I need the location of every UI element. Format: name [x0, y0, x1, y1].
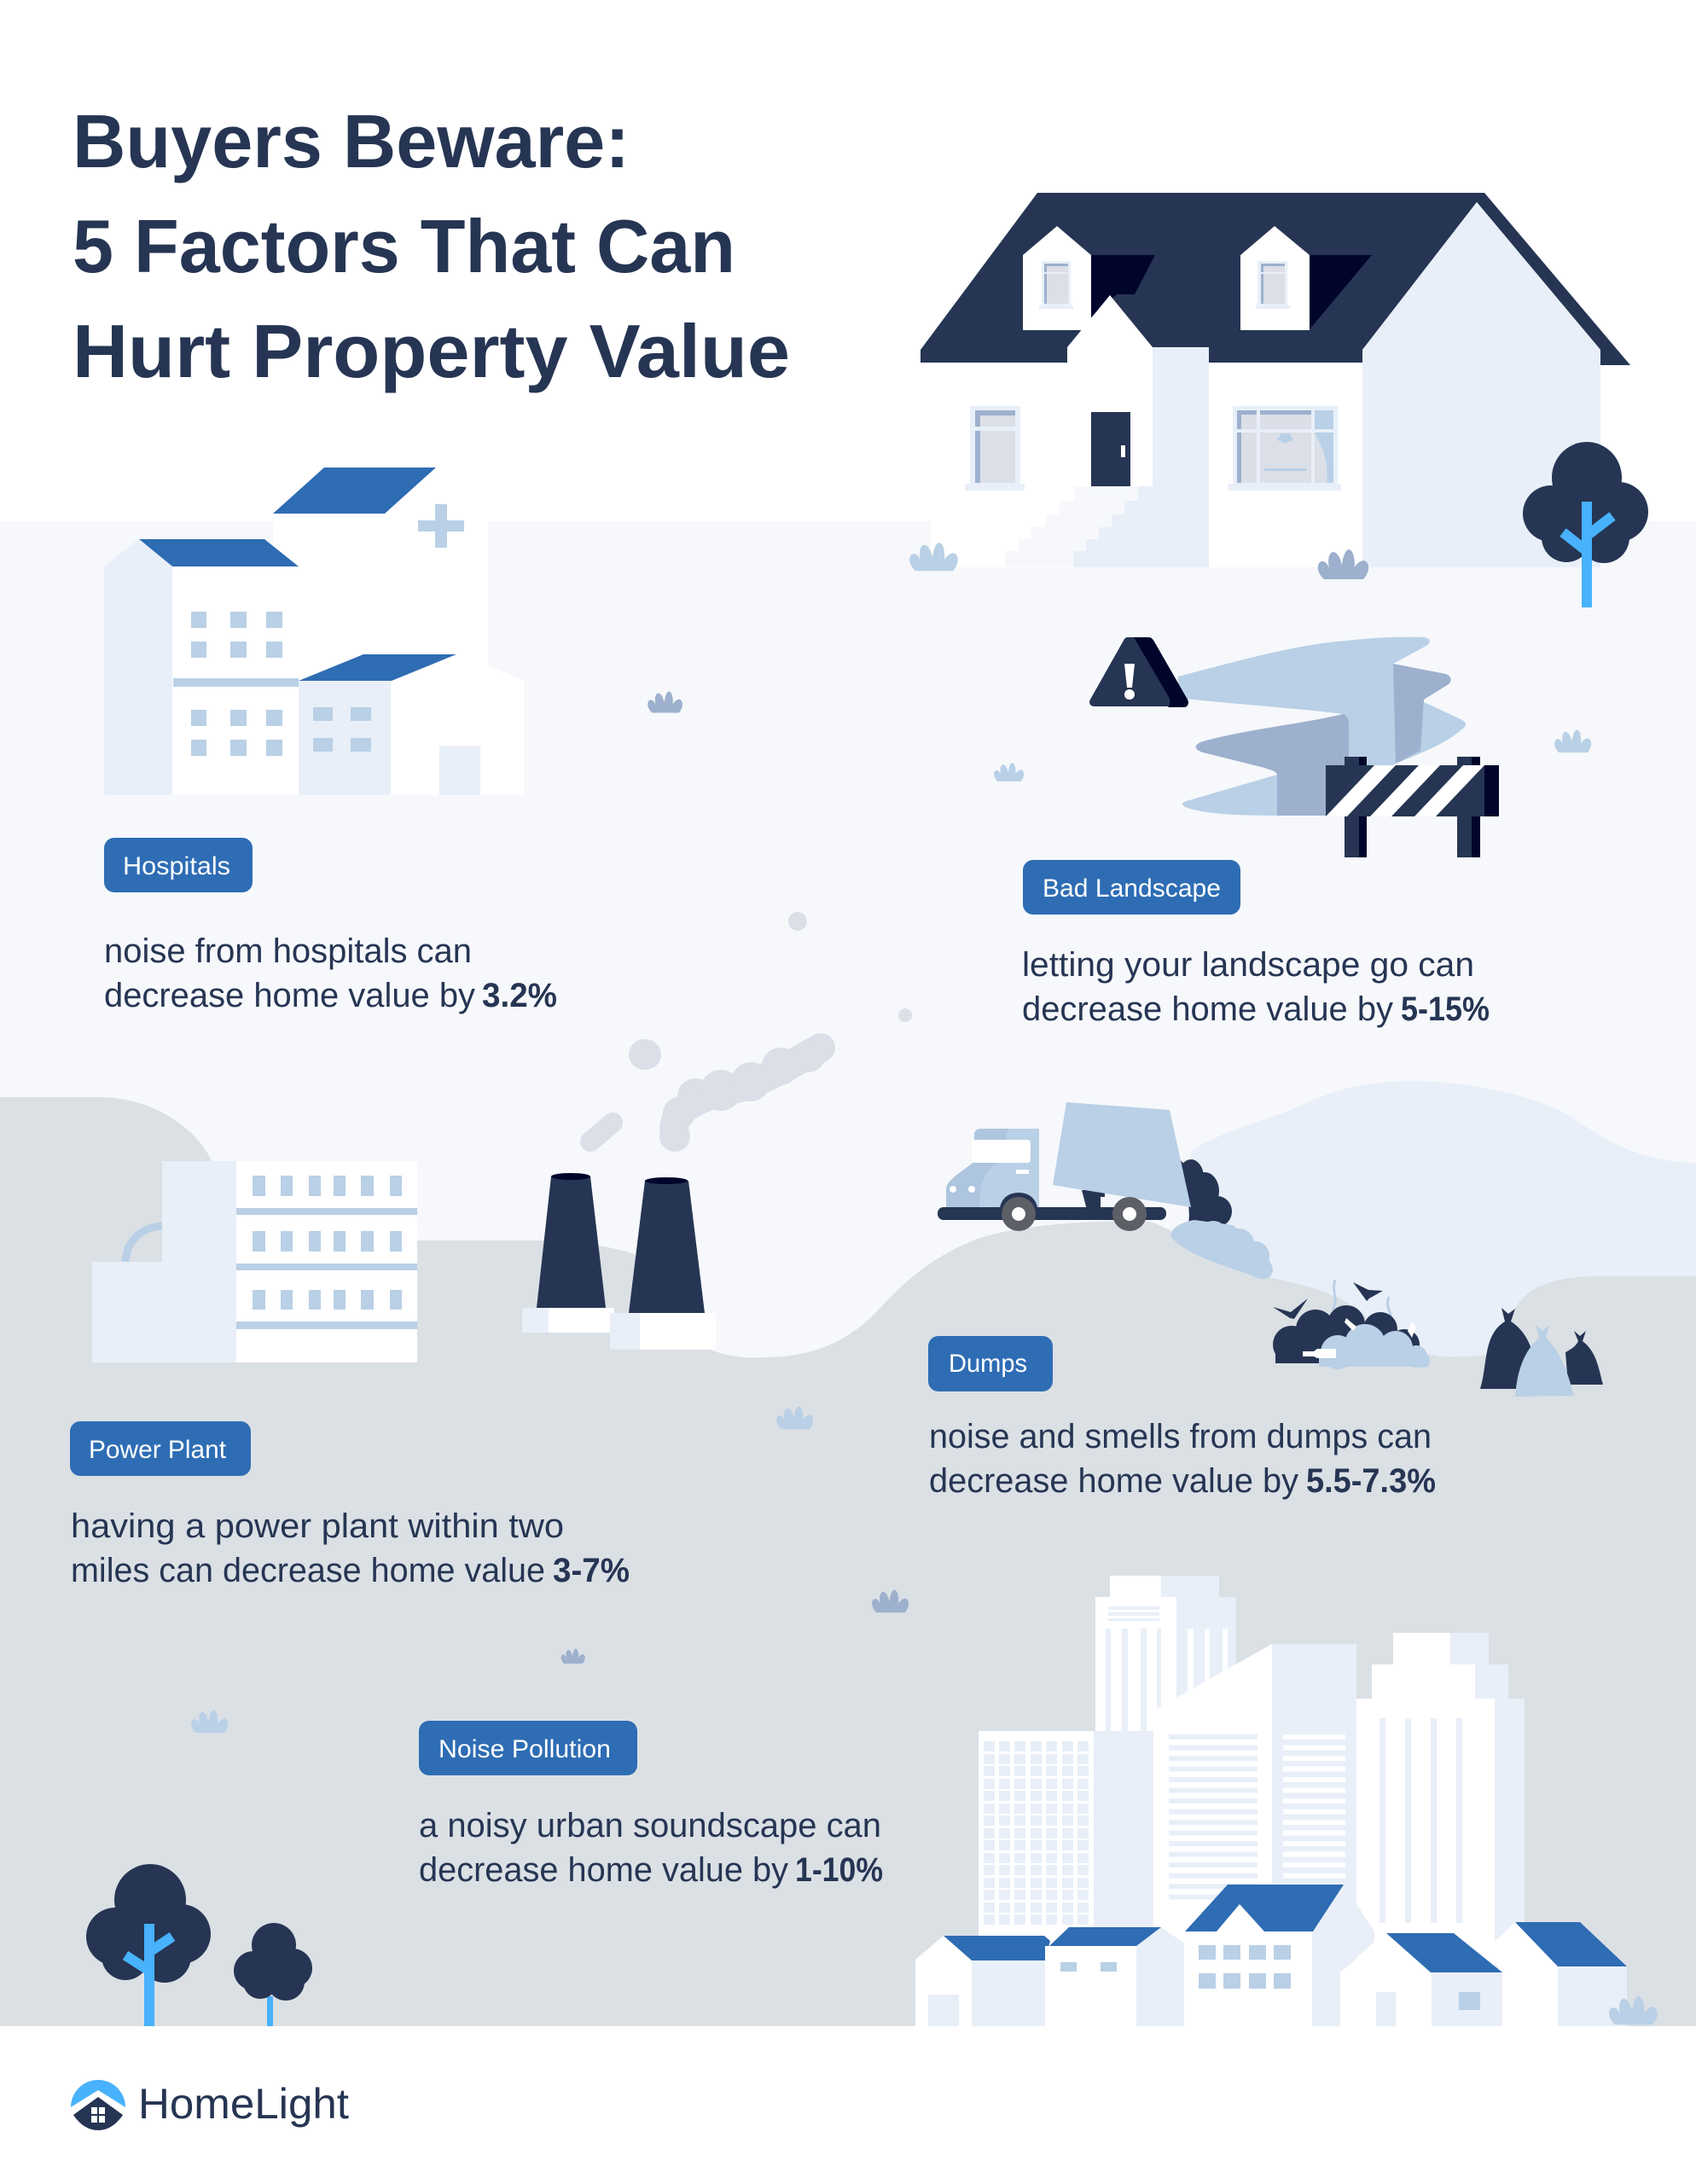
label: Noise Pollution: Noise Pollution: [439, 1735, 611, 1763]
bushes: [191, 543, 1591, 1733]
door: [1091, 412, 1130, 486]
hospital left wall: [104, 539, 172, 795]
birds: [1273, 1282, 1383, 1319]
dark trash: [1273, 1305, 1420, 1363]
light trash: [1319, 1324, 1430, 1369]
text: noise pollution: a noisy urban soundscape can: [419, 1807, 881, 1844]
bottle: [1303, 1349, 1336, 1358]
title: Buyers Beware:: [73, 99, 630, 183]
ground: pale background: [0, 521, 1696, 2026]
label: Power Plant: Power Plant: [89, 1436, 227, 1464]
icon: medical cross: [418, 504, 464, 548]
smokestack right: [610, 1177, 716, 1350]
icon: large tree: [86, 1864, 211, 2026]
truck hydraulic: [1082, 1190, 1105, 1210]
text: hospitals: [104, 932, 557, 1014]
hospital roofs: [139, 468, 456, 681]
plant wall: [92, 1161, 236, 1362]
illustration: power plant: [92, 1161, 716, 1362]
text: bad landscape: [1022, 946, 1490, 1028]
text: noise pollution: 1-10%: [795, 1851, 883, 1889]
house side wing: [1362, 202, 1600, 567]
large window: [1228, 406, 1341, 491]
illustration: city skyline: [915, 1576, 1627, 2027]
falling dark waste: [1178, 1159, 1232, 1229]
road barrier: [1326, 757, 1499, 857]
icon: small tree: [234, 1923, 312, 2026]
falling light waste: [1170, 1220, 1273, 1279]
text: power plant: miles can decrease home value: [71, 1552, 545, 1589]
ground: grey hills: [0, 1097, 1696, 2026]
back tower: [1095, 1576, 1236, 1757]
text: power plant: 3-7%: [553, 1552, 630, 1589]
text: bad landscape: decrease home value by: [1022, 990, 1393, 1028]
porch gable: [1067, 295, 1153, 486]
label: Power Plant: [70, 1421, 251, 1476]
house roof: [921, 193, 1630, 365]
illustration: dump truck: [938, 1102, 1273, 1279]
text: dumps: noise and smells from dumps can: [929, 1418, 1432, 1455]
label: Dumps: Dumps: [949, 1350, 1027, 1378]
text: dumps: [929, 1418, 1436, 1500]
truck headlights: [950, 1186, 956, 1193]
text: power plant: having a power plant within two: [71, 1507, 564, 1545]
label: Bad Landscape: Bad Landscape: [1043, 874, 1221, 903]
hospital annex wall: [299, 681, 391, 795]
smoke: [590, 912, 912, 1152]
text: dumps: 5.5-7.3%: [1306, 1462, 1436, 1500]
label: Bad Landscape: [1023, 860, 1240, 915]
icon: tree beside house: [1523, 442, 1648, 607]
text: hospitals: 3.2%: [482, 977, 557, 1014]
label: Dumps: [928, 1336, 1053, 1391]
illustration: bad landscape: [1094, 637, 1499, 857]
text: noise pollution: decrease home value by: [419, 1851, 788, 1889]
dormers: [1023, 226, 1310, 330]
illustration: trash bags: [1480, 1308, 1603, 1397]
text: noise pollution: [419, 1807, 883, 1889]
text: hospitals: noise from hospitals can: [104, 932, 472, 970]
label: Noise Pollution: [419, 1721, 637, 1775]
text: power plant: [71, 1507, 630, 1589]
townhouse A: [915, 1936, 1050, 2027]
label: Hospitals: Hospitals: [123, 852, 230, 880]
left tower: [979, 1731, 1153, 2027]
townhouse C: [1184, 1885, 1374, 2027]
text: dumps: decrease home value by: [929, 1462, 1298, 1500]
dormer windows: [1039, 261, 1290, 309]
townhouse B: [1045, 1927, 1184, 2027]
hospital windows: [173, 612, 371, 756]
icon: warning sign: [1094, 637, 1188, 707]
text: bad landscape: 5-15%: [1401, 990, 1490, 1028]
plant building: [236, 1161, 417, 1362]
title: Hurt Property Value: [73, 309, 790, 393]
pipe arc: [125, 1226, 164, 1264]
odor lines: [1333, 1280, 1391, 1327]
right tower: [1356, 1633, 1525, 2027]
illustration: house: [921, 193, 1630, 567]
text: hospitals: decrease home value by: [104, 977, 475, 1014]
plant windows: [236, 1176, 417, 1329]
sinkhole: [1178, 637, 1466, 816]
text: bad landscape: letting your landscape go can: [1022, 946, 1474, 984]
illustration: garbage pile: [1273, 1280, 1430, 1369]
middle tower: [1153, 1644, 1356, 2027]
truck chassis: [938, 1207, 1166, 1220]
background hill: pale blue: [1191, 1081, 1696, 1365]
footer band: [0, 2026, 1696, 2184]
porch stairs: shaded side: [1073, 486, 1153, 567]
logo: HomeLight: HomeLight: [138, 2080, 349, 2128]
bush: corner: [1609, 1996, 1658, 2024]
dump box: [1053, 1102, 1191, 1207]
dormer shadows: [1091, 255, 1372, 329]
truck cab: [946, 1129, 1039, 1207]
title: 5 Factors That Can: [73, 204, 735, 288]
townhouse D: [1340, 1933, 1502, 2027]
title: [73, 99, 790, 393]
hospital door: [439, 746, 480, 795]
truck window: [972, 1140, 1031, 1163]
townhouse E: [1495, 1922, 1627, 2027]
illustration: hospital: [104, 468, 524, 795]
porch stairs: treads: [1005, 486, 1138, 566]
truck wheels: [1002, 1197, 1147, 1231]
logo icon: [71, 2080, 125, 2130]
left window: [965, 406, 1025, 491]
label: Hospitals: [104, 838, 253, 892]
smokestack left: [522, 1173, 614, 1333]
